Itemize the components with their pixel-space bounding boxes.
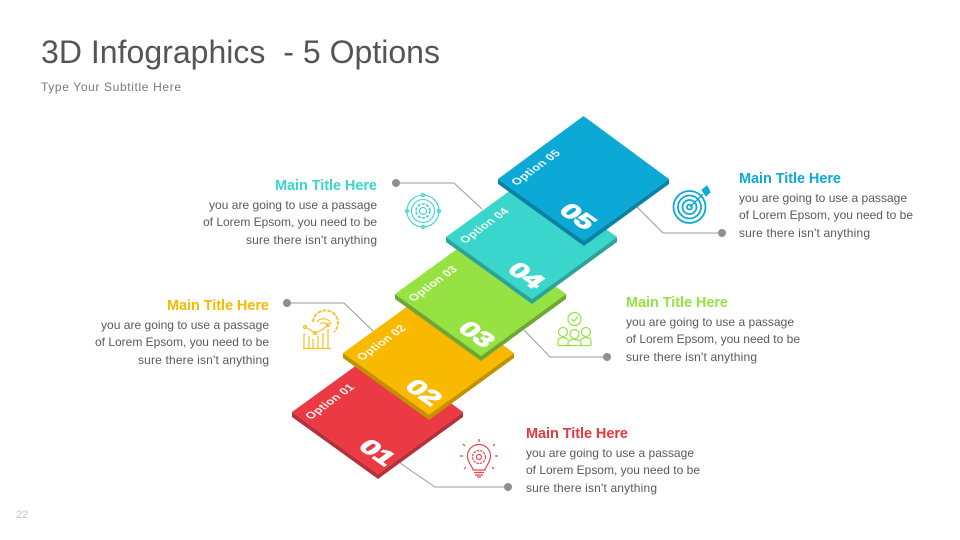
tile: option 5: 05: [554, 198, 603, 234]
text block: option 5: Main Title Here: [739, 171, 841, 187]
text block: option 1: sure there isn't anything: [526, 481, 657, 495]
icon: target: [674, 186, 710, 223]
tile: option 3: [395, 232, 566, 361]
text block: option 1: of Lorem Epsom, you need to be: [526, 463, 700, 477]
text block: option 5: sure there isn't anything: [739, 226, 870, 240]
tile: option 5: Option 05: [509, 148, 564, 188]
text block: option 4: [203, 178, 377, 247]
tile: option 2: Option 02: [355, 323, 409, 363]
text block: option 4: sure there isn't anything: [246, 233, 377, 247]
title: 3D Infographics - 5 Options: [41, 34, 440, 70]
leader line: option 4: [392, 179, 482, 209]
text block: option 2: Main Title Here: [167, 298, 269, 314]
leader line: option 1: [400, 463, 512, 491]
text block: option 1: you are going to use a passage: [526, 446, 694, 460]
leader line: option 2: [283, 299, 373, 331]
text block: option 1: [526, 426, 700, 495]
tile: option 1: [292, 350, 463, 479]
text block: option 2: [95, 298, 269, 367]
text block: option 3: sure there isn't anything: [626, 350, 757, 364]
page number: 22: [16, 509, 28, 521]
tile: option 1: 01: [353, 434, 402, 470]
tile: option 3: Option 03: [406, 264, 460, 304]
leader line: option 3: [524, 330, 611, 361]
tile: option 3: 03: [453, 316, 502, 352]
icon: light bulb with gear: [460, 439, 498, 477]
tile: option 4: 04: [502, 257, 551, 293]
tile: option 4: Option 04: [458, 206, 512, 246]
text block: option 3: you are going to use a passage: [626, 315, 794, 329]
text block: option 4: you are going to use a passage: [209, 198, 377, 212]
icon: chart and gear: [303, 310, 338, 348]
text block: option 4: Main Title Here: [275, 178, 377, 194]
tile: option 2: 02: [400, 374, 449, 410]
text block: option 4: of Lorem Epsom, you need to be: [203, 215, 377, 229]
text block: option 3: [626, 295, 800, 364]
text block: option 3: Main Title Here: [626, 295, 728, 311]
text block: option 2: you are going to use a passage: [101, 318, 269, 332]
text block: option 5: of Lorem Epsom, you need to be: [739, 208, 913, 222]
tile: option 1: Option 01: [303, 382, 358, 422]
tile: option 5: [498, 116, 669, 246]
text block: option 5: [739, 171, 913, 240]
icon: gear rings: [406, 194, 440, 228]
text block: option 3: of Lorem Epsom, you need to be: [626, 332, 800, 346]
icon: team with check: [558, 312, 591, 346]
leader line: option 5: [637, 207, 726, 237]
subtitle: Type Your Subtitle Here: [41, 80, 181, 94]
text block: option 1: Main Title Here: [526, 426, 628, 442]
tile: option 4: [446, 175, 617, 304]
text block: option 2: sure there isn't anything: [138, 353, 269, 367]
text block: option 5: you are going to use a passage: [739, 191, 907, 205]
tile: option 2: [343, 291, 514, 420]
text block: option 2: of Lorem Epsom, you need to be: [95, 335, 269, 349]
